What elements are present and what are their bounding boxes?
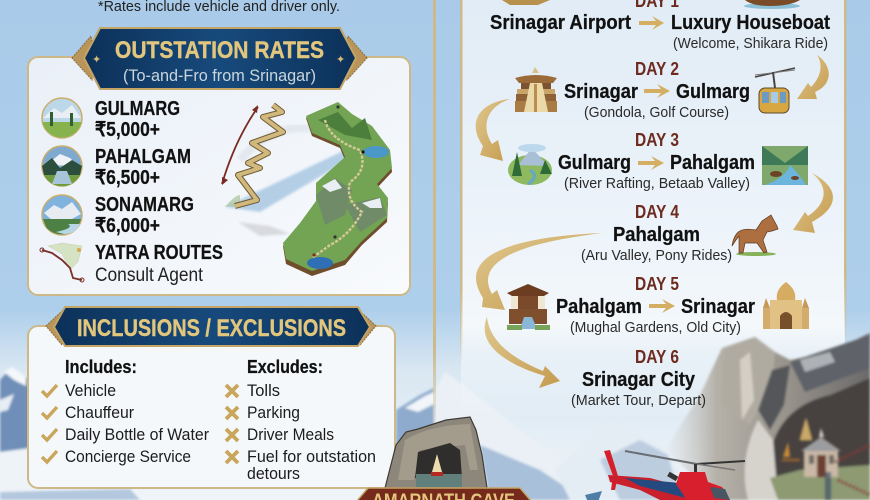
column: includes: Concierge Service bbox=[65, 447, 191, 466]
row: gulmarg bbox=[42, 98, 180, 141]
day 2 bbox=[515, 59, 795, 121]
icon: helicopter bbox=[585, 450, 745, 500]
column: excludes: Excludes: bbox=[247, 357, 323, 377]
panel: inclusions and exclusions bbox=[28, 326, 395, 488]
column: excludes: detours bbox=[247, 464, 300, 483]
day 5: DAY 5 bbox=[635, 274, 679, 294]
column: excludes: Driver Meals bbox=[247, 425, 334, 444]
day 3 bbox=[508, 130, 808, 192]
column: excludes: Fuel for outstation bbox=[247, 447, 376, 466]
icon: amarnath cave bbox=[385, 417, 487, 488]
day 2: Gulmarg bbox=[676, 81, 750, 103]
banner: outstation rates: OUTSTATION RATES bbox=[115, 37, 324, 64]
banner: outstation rates: ✦ bbox=[336, 54, 345, 66]
row: sonamarg: ₹6,000+ bbox=[95, 215, 160, 237]
day 4: (Aru Valley, Pony Rides) bbox=[581, 247, 732, 264]
column: excludes bbox=[226, 357, 376, 483]
day 2: Srinagar bbox=[564, 81, 638, 103]
row: pahalgam: PAHALGAM bbox=[95, 146, 191, 168]
shrine at the cave bbox=[782, 428, 870, 500]
rocky cliff with cave entrance bbox=[665, 333, 870, 500]
banner: outstation rates bbox=[72, 28, 367, 89]
day 4: DAY 4 bbox=[635, 202, 679, 222]
row: sonamarg bbox=[42, 194, 194, 237]
row: yatra routes: Consult Agent bbox=[95, 265, 204, 286]
day 5: (Mughal Gardens, Old City) bbox=[570, 319, 741, 336]
day 5: Pahalgam bbox=[556, 296, 642, 318]
day 5 bbox=[507, 274, 809, 336]
day 1 bbox=[490, 0, 830, 52]
vertical gold rail bbox=[433, 0, 436, 432]
day 1: (Welcome, Shikara Ride) bbox=[673, 35, 828, 52]
day 4 bbox=[581, 202, 778, 264]
column: includes: Vehicle bbox=[65, 381, 116, 400]
day 6: (Market Tour, Depart) bbox=[571, 392, 706, 409]
day 1: Luxury Houseboat bbox=[671, 12, 830, 34]
banner: outstation rates: (To-and-Fro from Srinagar) bbox=[123, 66, 316, 85]
column: excludes: Tolls bbox=[247, 381, 280, 400]
row: gulmarg: ₹5,000+ bbox=[95, 119, 160, 141]
row: sonamarg: SONAMARG bbox=[95, 194, 194, 216]
row: gulmarg: GULMARG bbox=[95, 98, 180, 120]
day 5: Srinagar bbox=[681, 296, 755, 318]
column: includes: Chauffeur bbox=[65, 403, 134, 422]
day 3: DAY 3 bbox=[635, 130, 679, 150]
day 6 bbox=[571, 347, 706, 409]
label: amarnath cave bbox=[356, 488, 532, 500]
banner: outstation rates: ✦ bbox=[92, 54, 101, 66]
row: yatra routes bbox=[40, 242, 223, 286]
column: includes: Daily Bottle of Water bbox=[65, 425, 209, 444]
panel: outstation rates bbox=[28, 57, 410, 295]
day 2: DAY 2 bbox=[635, 59, 679, 79]
day 3: Pahalgam bbox=[670, 152, 755, 174]
banner: inclusions and exclusions: INCLUSIONS / EXCLUSIONS bbox=[77, 315, 346, 342]
map illustration bbox=[222, 102, 392, 276]
day 2: (Gondola, Golf Course) bbox=[584, 104, 729, 121]
day 1: Srinagar Airport bbox=[490, 12, 631, 34]
column: includes bbox=[42, 357, 209, 466]
curved arrows between days bbox=[476, 55, 833, 388]
day 3: Gulmarg bbox=[558, 152, 631, 174]
column: includes: Includes: bbox=[65, 357, 137, 377]
itinerary panel background bbox=[460, 0, 846, 420]
row: pahalgam: ₹6,500+ bbox=[95, 167, 160, 189]
day 6: Srinagar City bbox=[582, 369, 696, 391]
day 3: (River Rafting, Betaab Valley) bbox=[564, 175, 750, 192]
row: pahalgam bbox=[42, 146, 191, 189]
row: yatra routes: YATRA ROUTES bbox=[95, 242, 223, 264]
column: excludes: Parking bbox=[247, 403, 300, 422]
panel: six-day itinerary bbox=[476, 0, 833, 409]
day 6: DAY 6 bbox=[635, 347, 679, 367]
day 4: Pahalgam bbox=[613, 224, 700, 246]
banner: inclusions and exclusions bbox=[46, 307, 376, 346]
